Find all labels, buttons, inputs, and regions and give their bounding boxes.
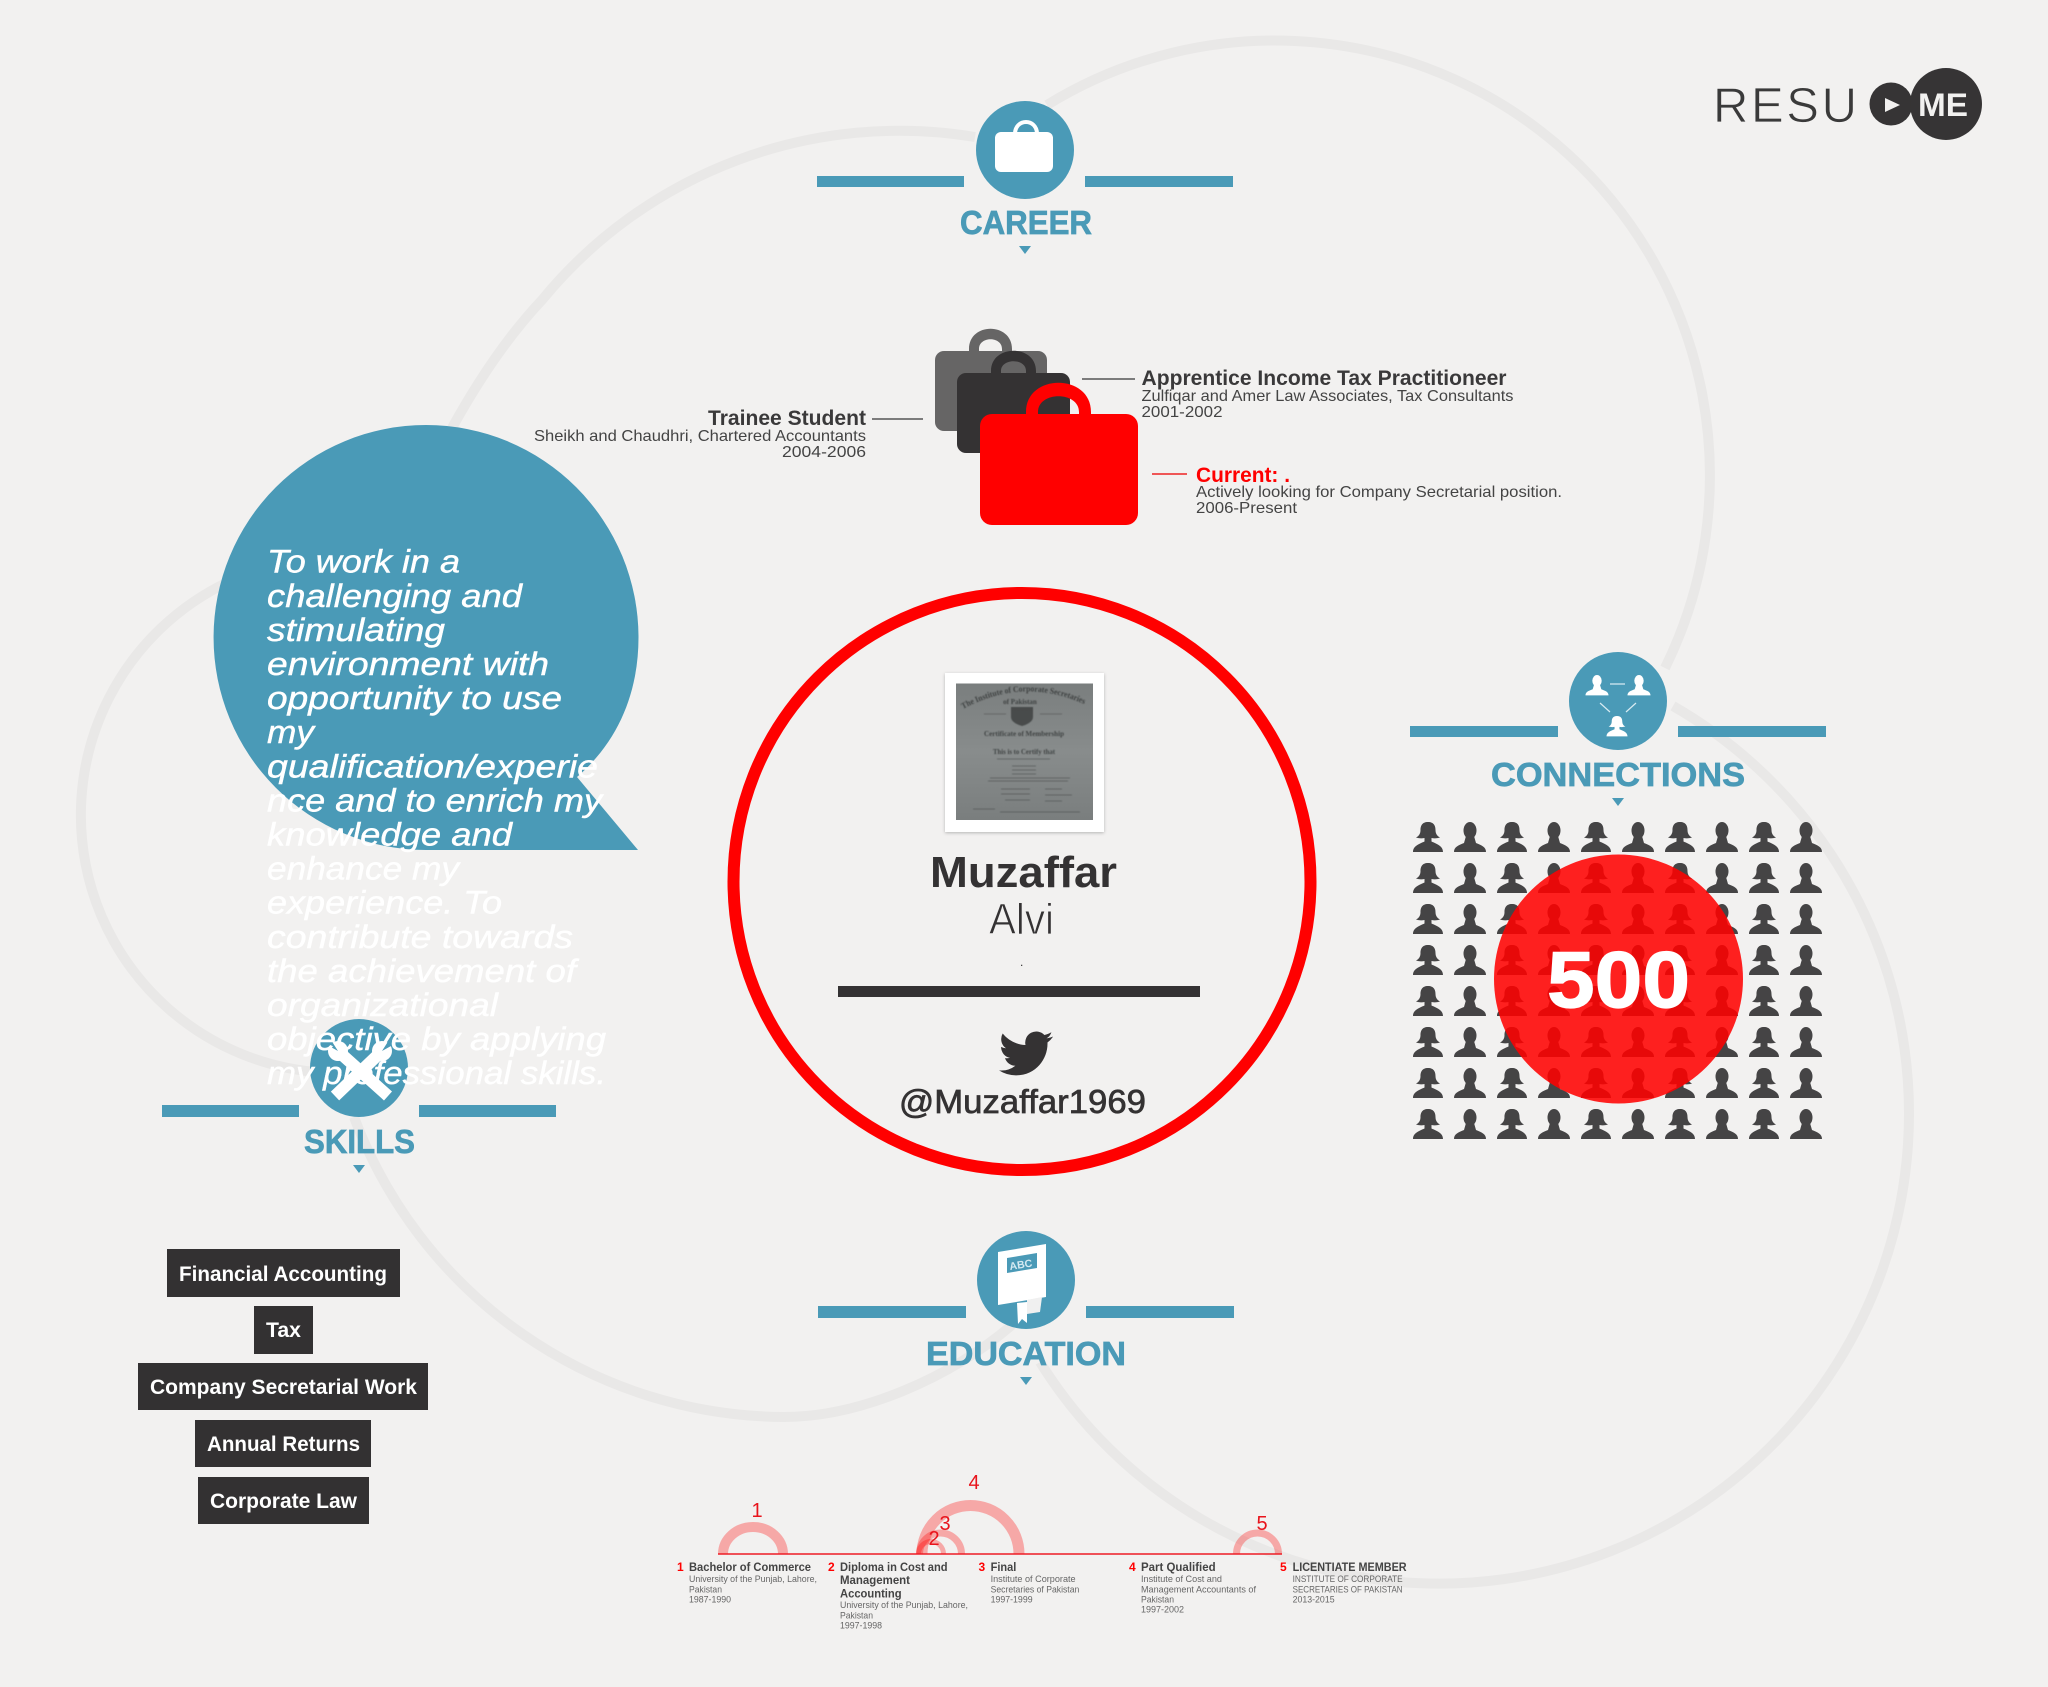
skill: annual returns bbox=[195, 1420, 371, 1467]
objective text: stimulating bbox=[267, 612, 445, 648]
education entry 5 bbox=[1280, 1560, 1407, 1604]
education entry 4: Institute of Cost and bbox=[1141, 1574, 1222, 1584]
profile photo: certificate: The Institute of Corporate Secretaries bbox=[960, 686, 1086, 708]
objective text: knowledge and bbox=[267, 816, 513, 852]
education timeline bbox=[677, 1472, 1407, 1630]
logo: ResuMe: ME bbox=[1918, 87, 1968, 123]
connections people grid bbox=[1413, 822, 1822, 1139]
education entry 1 bbox=[677, 1560, 817, 1604]
career entry: trainee student: 2004-2006 bbox=[782, 444, 866, 461]
education entry 3: Final bbox=[991, 1562, 1016, 1574]
career entry: apprentice: Apprentice Income Tax Practitioneer bbox=[1142, 367, 1506, 390]
icon: book with ribbon bbox=[998, 1244, 1046, 1324]
skill: financial accounting: Financial Accounting bbox=[179, 1263, 387, 1286]
skills tags bbox=[138, 1249, 428, 1524]
career entry: trainee student bbox=[534, 407, 923, 461]
arc numbers bbox=[751, 1472, 1268, 1550]
skill: company secretarial work bbox=[138, 1363, 428, 1410]
career entry: current bbox=[1152, 464, 1562, 517]
profile photo: certificate: of Pakistan bbox=[1003, 698, 1037, 706]
education entry 2: Accounting bbox=[840, 1588, 902, 1600]
education entry 3: Institute of Corporate bbox=[991, 1574, 1076, 1584]
section header: career: CAREER bbox=[960, 204, 1092, 241]
education entry 3: Secretaries of Pakistan bbox=[991, 1584, 1079, 1594]
career entry: current: 2006-Present bbox=[1196, 500, 1298, 517]
education entry 1: Bachelor of Commerce bbox=[689, 1562, 811, 1574]
education entry 4: 4 bbox=[1129, 1560, 1136, 1574]
connections count badge: 500 bbox=[1547, 935, 1690, 1024]
education entry 1: University of the Punjab, Lahore, bbox=[689, 1574, 817, 1584]
objective text: challenging and bbox=[267, 578, 523, 614]
objective text: enhance my bbox=[267, 851, 461, 887]
logo: ResuMe: RESU bbox=[1713, 79, 1857, 133]
profile name: Alvi bbox=[989, 895, 1054, 944]
education entry 5: 5 bbox=[1280, 1560, 1287, 1574]
objective speech bubble bbox=[214, 425, 638, 850]
education entry 5: SECRETARIES OF PAKISTAN bbox=[1293, 1584, 1403, 1594]
education entry 1: 1 bbox=[677, 1560, 684, 1574]
education entry 1: Pakistan bbox=[689, 1584, 722, 1594]
education entry 2: 2 bbox=[828, 1560, 835, 1574]
education entry 4 bbox=[1129, 1560, 1256, 1614]
objective text: experience. To bbox=[267, 885, 502, 921]
education entry 1: 1987-1990 bbox=[689, 1594, 731, 1604]
icon: dark briefcase bbox=[957, 351, 1070, 453]
profile divider bbox=[838, 986, 1200, 997]
career timeline bbox=[534, 329, 1562, 525]
career entry: apprentice bbox=[1082, 367, 1514, 421]
education entry 4: Management Accountants of bbox=[1141, 1584, 1256, 1594]
education entry 5: LICENTIATE MEMBER bbox=[1293, 1562, 1407, 1574]
education entry 4: Part Qualified bbox=[1141, 1562, 1216, 1574]
skill: tax bbox=[254, 1306, 313, 1354]
education entry 4: 1997-2002 bbox=[1141, 1604, 1184, 1614]
education entry 2: 1997-1998 bbox=[840, 1620, 882, 1630]
section header: skills bbox=[162, 1019, 556, 1173]
profile: red ring bbox=[734, 593, 1310, 1170]
career entry: apprentice: 2001-2002 bbox=[1142, 404, 1223, 421]
connections count badge bbox=[1494, 854, 1743, 1104]
arc numbers: 2 bbox=[928, 1528, 940, 1550]
education entry 2 bbox=[828, 1560, 968, 1630]
profile name bbox=[930, 848, 1117, 969]
arc numbers: 4 bbox=[968, 1472, 980, 1494]
twitter handle: @Muzaffar1969 bbox=[899, 1083, 1146, 1120]
objective text: my bbox=[267, 714, 316, 750]
objective text: the achievement of bbox=[267, 953, 580, 989]
objective text: organizational bbox=[267, 987, 499, 1023]
objective text bbox=[267, 544, 606, 1091]
education entry 2: Pakistan bbox=[840, 1611, 873, 1621]
section header: skills: SKILLS bbox=[304, 1123, 415, 1160]
section header: education: EDUCATION bbox=[926, 1335, 1126, 1372]
objective text: environment with bbox=[267, 646, 549, 682]
section header: connections bbox=[1410, 652, 1826, 806]
education entry 5: 2013-2015 bbox=[1293, 1594, 1335, 1604]
skill: corporate law: Corporate Law bbox=[210, 1490, 358, 1513]
objective text: To work in a bbox=[267, 544, 460, 580]
arc numbers: 5 bbox=[1256, 1513, 1268, 1535]
education entry 4: Pakistan bbox=[1141, 1594, 1174, 1604]
education entry 5: INSTITUTE OF CORPORATE bbox=[1293, 1574, 1403, 1584]
skill: annual returns: Annual Returns bbox=[207, 1433, 360, 1456]
profile name: . bbox=[1020, 955, 1023, 969]
skill: tax: Tax bbox=[266, 1319, 301, 1342]
objective text: contribute towards bbox=[267, 919, 573, 955]
education entry 2: Management bbox=[840, 1575, 910, 1587]
timeline arcs bbox=[723, 1506, 1278, 1554]
education entry 3: 1997-1999 bbox=[991, 1594, 1033, 1604]
section header: education bbox=[818, 1231, 1234, 1385]
icon: gray briefcase bbox=[935, 329, 1047, 431]
objective text: opportunity to use bbox=[267, 680, 562, 716]
icon: briefcase bbox=[995, 122, 1053, 172]
profile photo: certificate bbox=[943, 672, 1106, 835]
section header: career bbox=[817, 101, 1233, 254]
icon: red briefcase bbox=[980, 383, 1138, 525]
career entry: trainee student: Trainee Student bbox=[708, 407, 866, 430]
profile photo: certificate: Certificate of Membership bbox=[984, 729, 1064, 738]
skill: financial accounting bbox=[167, 1249, 400, 1297]
career entry: trainee student: Sheikh and Chaudhri, Chartered Accountants bbox=[534, 428, 866, 445]
icon: book with ribbon: ABC bbox=[1009, 1257, 1034, 1273]
profile name: Muzaffar bbox=[930, 848, 1117, 897]
objective text: qualification/experie bbox=[267, 748, 598, 784]
skill: company secretarial work: Company Secretarial Work bbox=[150, 1376, 417, 1399]
education entry 3 bbox=[978, 1560, 1079, 1604]
profile photo: certificate: This is to Certify that bbox=[993, 748, 1056, 756]
education entry 3: 3 bbox=[978, 1560, 986, 1574]
icon: network of people bbox=[1585, 675, 1651, 736]
arc numbers: 1 bbox=[751, 1500, 763, 1522]
icon: twitter bird bbox=[999, 1031, 1053, 1075]
skill: corporate law bbox=[198, 1477, 369, 1524]
section header: connections: CONNECTIONS bbox=[1491, 756, 1745, 793]
objective text: nce and to enrich my bbox=[267, 782, 604, 818]
arc numbers: 3 bbox=[939, 1513, 951, 1535]
career entry: current: Actively looking for Company Secretarial position. bbox=[1196, 484, 1562, 501]
career entry: apprentice: Zulfiqar and Amer Law Associates, Tax Consultants bbox=[1142, 388, 1514, 405]
objective text: my professional skills. bbox=[267, 1055, 606, 1091]
education entry 2: University of the Punjab, Lahore, bbox=[840, 1600, 968, 1610]
logo: ResuMe bbox=[1713, 68, 1982, 140]
education entry 2: Diploma in Cost and bbox=[840, 1562, 948, 1574]
objective text: objective by applying bbox=[267, 1021, 606, 1057]
career entry: current: Current: . bbox=[1196, 464, 1290, 487]
icon: crossed wrenches bbox=[328, 1040, 392, 1096]
